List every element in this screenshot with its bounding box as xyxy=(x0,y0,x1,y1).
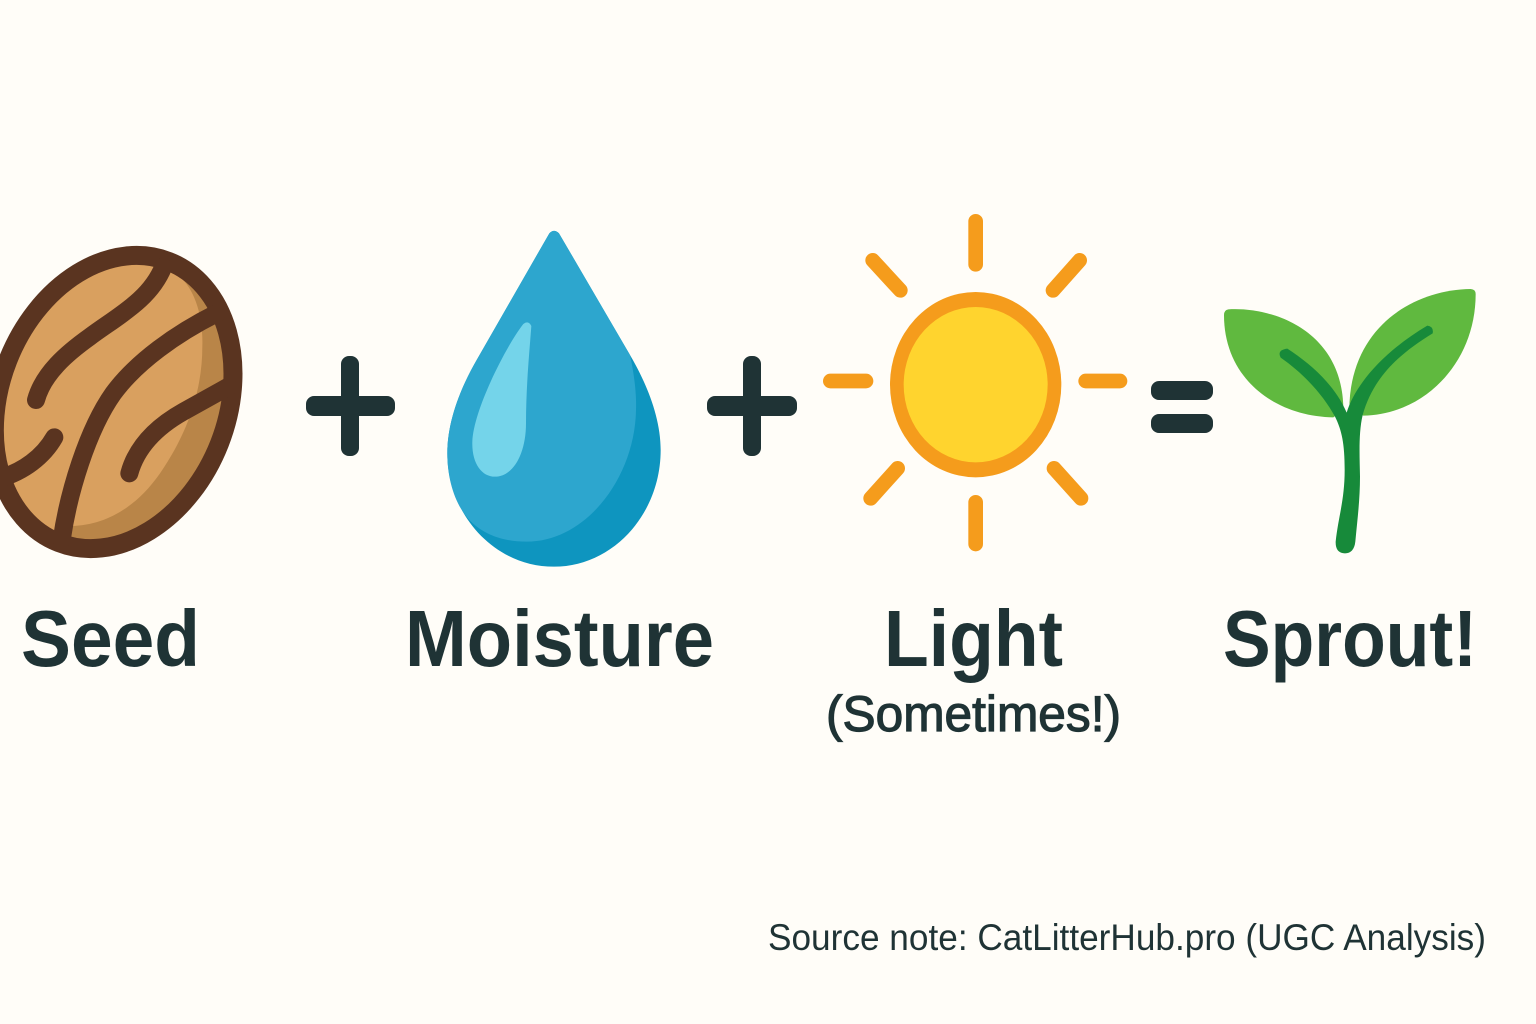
source note: Source note: CatLitterHub.pro (UGC Analysis) xyxy=(768,917,1486,958)
icon: plus two xyxy=(707,356,797,456)
label: Moisture: Moisture xyxy=(405,594,714,683)
label: Seed: Seed xyxy=(21,594,200,683)
label: Sprout!: Sprout! xyxy=(1223,594,1477,683)
icon: seed xyxy=(0,246,242,558)
icon: sprout xyxy=(1224,289,1476,553)
icon: water drop xyxy=(447,231,661,567)
label: (Sometimes!): (Sometimes!) xyxy=(826,686,1121,742)
icon: plus one xyxy=(306,356,395,456)
icon: sun xyxy=(830,221,1120,544)
label: Light: Light xyxy=(884,594,1063,683)
icon: equals sign xyxy=(1151,381,1213,433)
